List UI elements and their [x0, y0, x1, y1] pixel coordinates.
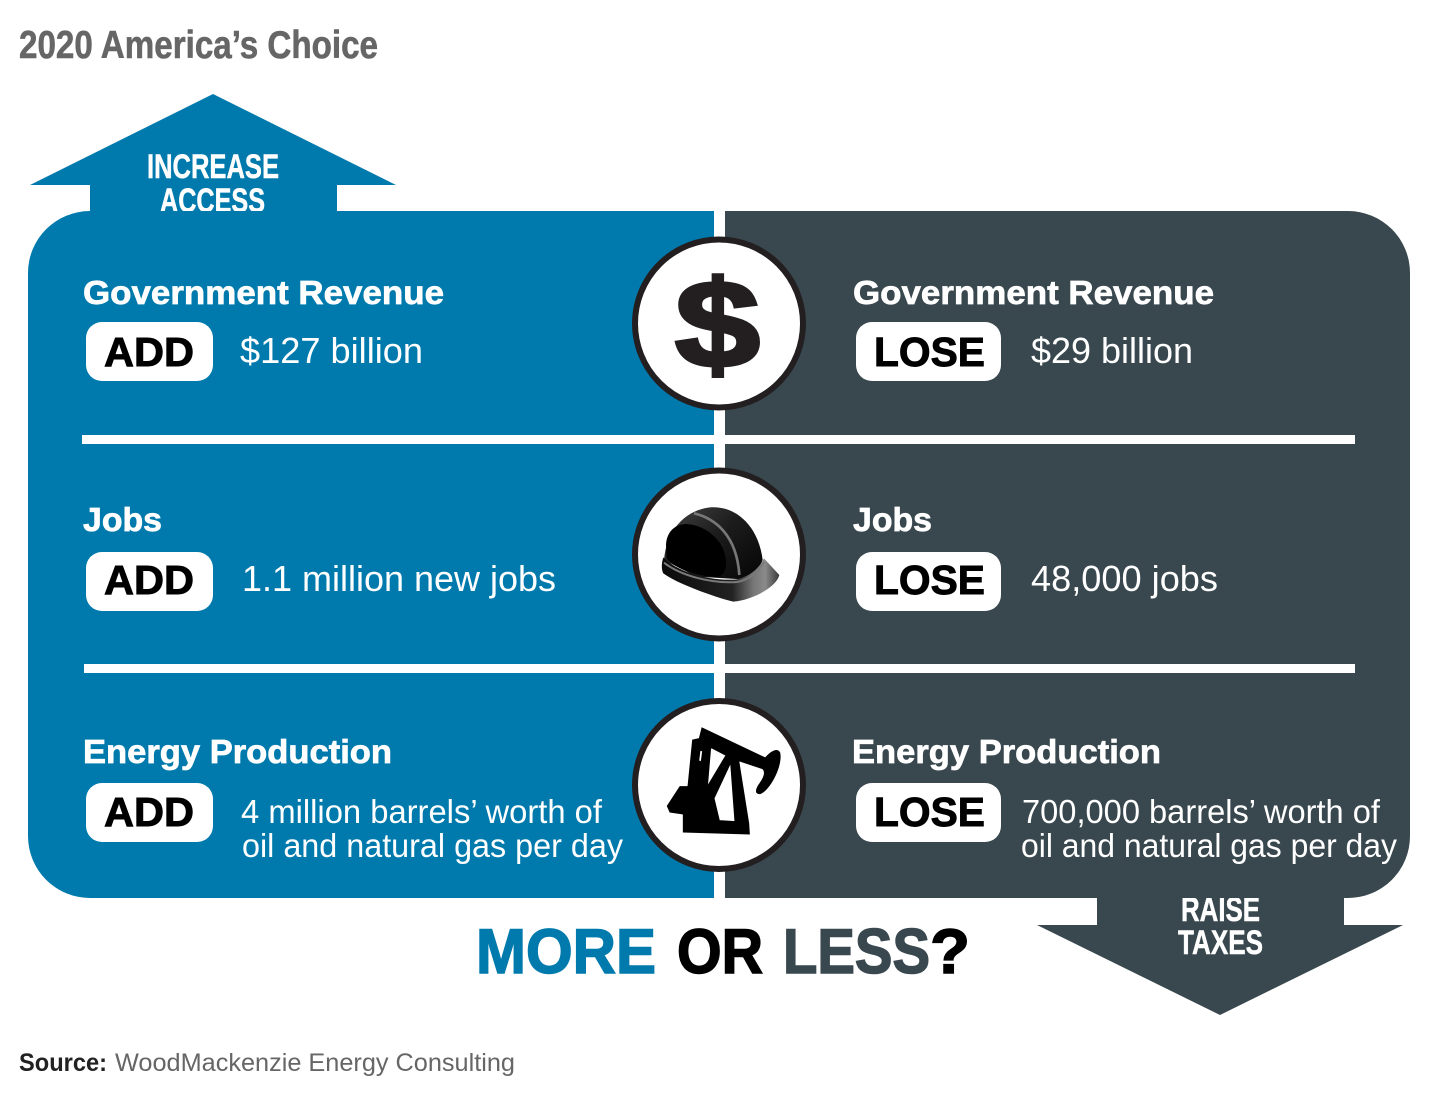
jobs: add: Jobs — [83, 501, 162, 538]
headline: more or less: LESS — [783, 917, 930, 987]
source note: WoodMackenzie Energy Consulting — [115, 1049, 515, 1077]
government revenue: lose — [853, 274, 1214, 381]
government revenue: add — [83, 274, 444, 381]
energy production: lose — [852, 733, 1397, 864]
headline: more or less: OR — [677, 917, 763, 987]
government revenue: lose: Government Revenue — [853, 274, 1214, 311]
jobs: add — [83, 501, 556, 611]
energy production: add: ADD — [104, 789, 194, 835]
arrow: raise taxes: TAXES — [1178, 924, 1263, 962]
icon: oil pump jack — [635, 701, 803, 869]
arrow: increase access: ACCESS — [160, 182, 265, 220]
energy production: add: oil and natural gas per day — [242, 827, 623, 864]
arrow: raise taxes: RAISE — [1181, 891, 1260, 929]
panel: increase access — [28, 211, 714, 898]
jobs: add: ADD — [104, 557, 194, 603]
energy production: add: 4 million barrels’ worth of — [241, 793, 603, 830]
energy production: lose: 700,000 barrels’ worth of — [1022, 793, 1381, 830]
icon: dollar sign: $ — [675, 256, 760, 394]
government revenue: add: Government Revenue — [83, 274, 444, 311]
headline: more or less — [476, 917, 970, 987]
icon: dollar sign — [635, 240, 803, 408]
energy production: lose: LOSE — [874, 789, 985, 835]
government revenue: add: $127 billion — [240, 330, 423, 371]
jobs: lose: Jobs — [853, 501, 932, 538]
headline: more or less: MORE — [476, 917, 656, 987]
title: 2020 America’s Choice — [19, 24, 378, 67]
government revenue: lose: LOSE — [874, 329, 985, 375]
arrow: increase access: INCREASE — [147, 148, 279, 186]
arrow: raise taxes — [1037, 891, 1403, 1015]
government revenue: add: ADD — [104, 329, 194, 375]
arrow: increase access — [30, 94, 396, 220]
source note: Source: — [19, 1049, 107, 1077]
jobs: lose: LOSE — [874, 557, 985, 603]
jobs: add: 1.1 million new jobs — [242, 558, 556, 599]
energy production: lose: oil and natural gas per day — [1021, 827, 1397, 864]
panel: raise taxes — [725, 211, 1410, 898]
jobs: lose: 48,000 jobs — [1031, 558, 1218, 599]
icon: hard hat — [635, 470, 803, 638]
energy production: add: Energy Production — [83, 733, 392, 770]
energy production: add — [83, 733, 623, 864]
headline: more or less: ? — [930, 917, 970, 987]
energy production: lose: Energy Production — [852, 733, 1161, 770]
jobs: lose — [853, 501, 1218, 611]
government revenue: lose: $29 billion — [1031, 330, 1193, 371]
